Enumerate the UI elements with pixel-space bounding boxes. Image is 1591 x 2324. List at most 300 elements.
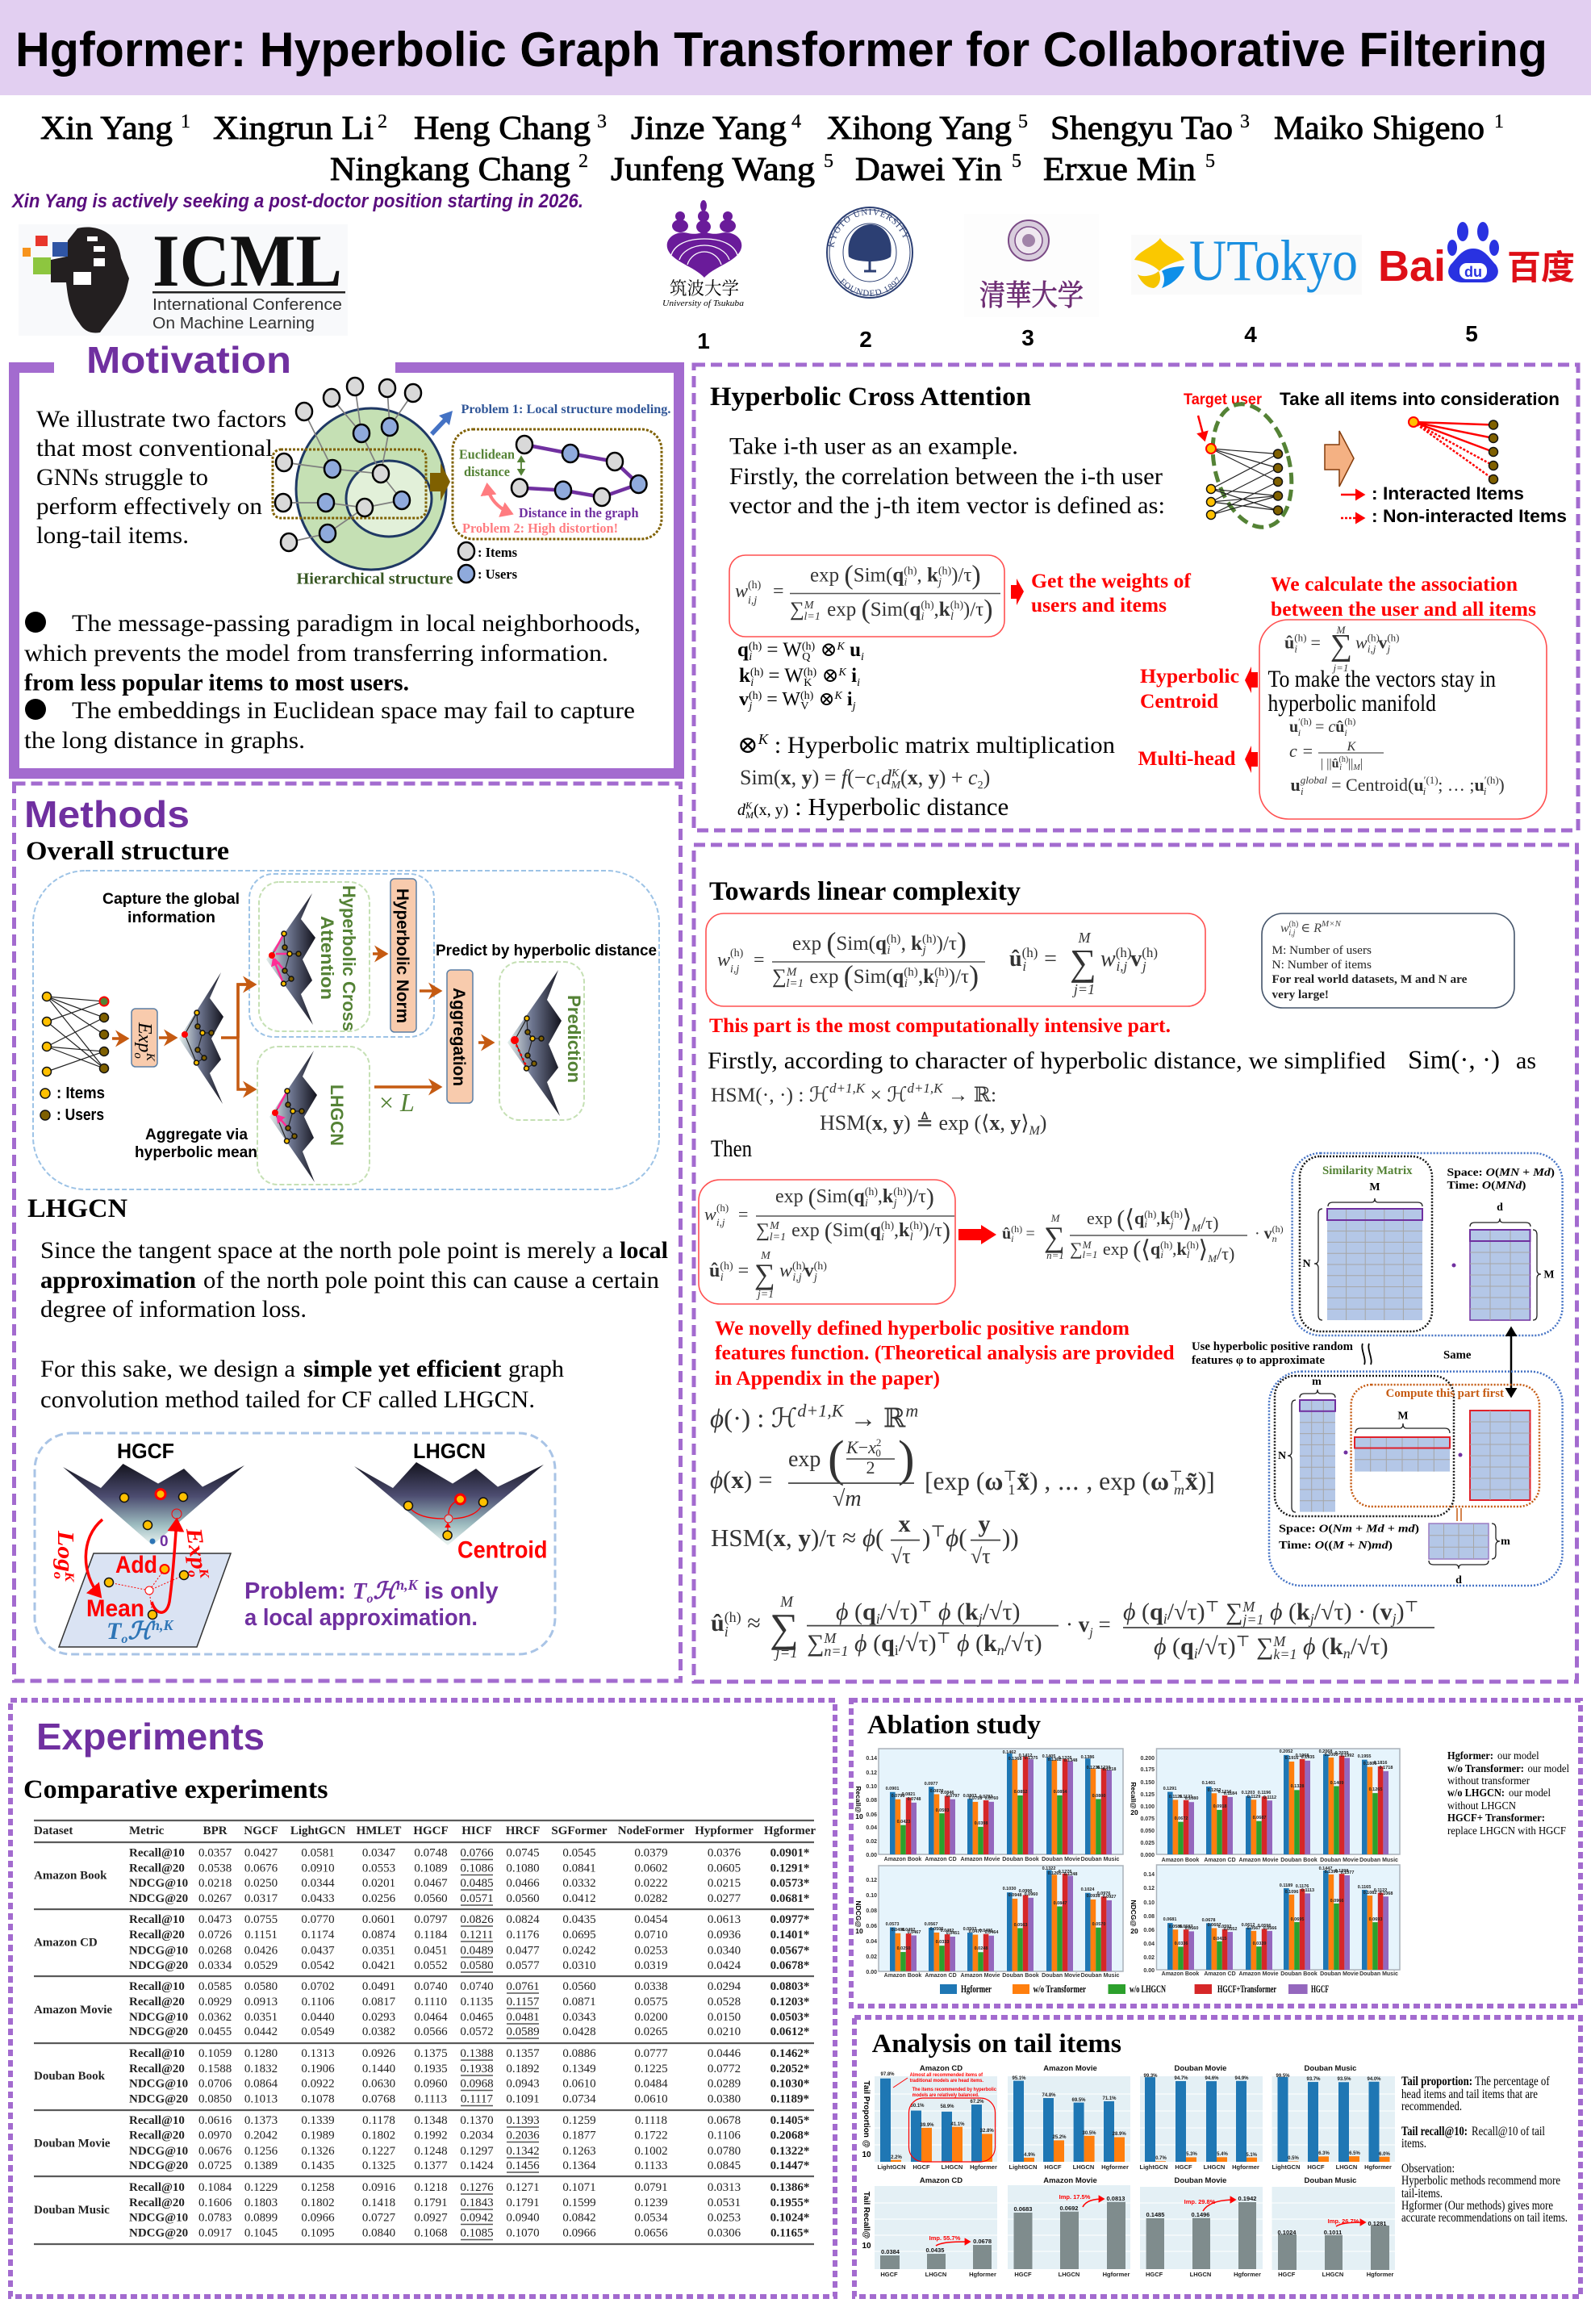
formula box: computationally intensive: k xyxy=(911,933,922,955)
chart: NDCG@20: 0.14 xyxy=(1143,1872,1155,1878)
diagram: random feature decomposition: Space: O(Nm + Md + md) xyxy=(1279,1524,1419,1536)
formula: HSM approximation: )) xyxy=(1002,1524,1019,1552)
formula box: computationally intensive: (h) xyxy=(730,947,744,959)
chart group: tail recall: Hgformer xyxy=(1103,2271,1130,2278)
rows: Douban Music: 0.0916 xyxy=(362,2181,396,2194)
rows: Douban Book: 0.1349 xyxy=(562,2063,596,2075)
chart group: tail proportion: 74.8% xyxy=(1042,2093,1056,2098)
rows: Amazon Book: 0.0681* xyxy=(770,1892,809,1905)
HGCF side: ℋ xyxy=(127,1618,156,1645)
formula: rewritten attention: /τ) xyxy=(1217,1244,1234,1264)
formula: rewritten attention: M xyxy=(1050,1212,1061,1224)
chart: Recall@20: 0.1409 xyxy=(1330,1781,1343,1786)
text: hyperbolic matrix multiplication: K xyxy=(758,731,769,747)
Exp box: Exp xyxy=(134,1022,155,1052)
arrow: red block xyxy=(958,1225,996,1244)
formulas: q k v: (h) xyxy=(804,667,817,679)
HGCF side: o xyxy=(185,1570,199,1578)
rows: Douban Movie: 0.1405* xyxy=(770,2114,809,2127)
rows: Douban Book: 0.1388 xyxy=(460,2047,494,2060)
chart: Recall@10: 0.0901 xyxy=(886,1787,899,1791)
note: use random features to approximate: Use hyperbolic positive random xyxy=(1192,1340,1353,1353)
rows: Douban Music: 0.0656 xyxy=(634,2227,668,2240)
formula box: centroid: i xyxy=(1301,785,1304,797)
rows: Douban Movie: 0.1377 xyxy=(414,2159,448,2172)
formula box: computationally intensive: Sim( xyxy=(836,933,875,955)
heading: Analysis on tail items xyxy=(872,2029,1121,2059)
chart: NDCG@20: 0.1189 xyxy=(1280,1883,1292,1888)
formula: rewritten attention: q xyxy=(1134,1208,1145,1228)
heading: Towards linear complexity xyxy=(709,877,1021,906)
formula box: centroid: global xyxy=(1301,774,1327,786)
diagram: overall structure: LHGCN xyxy=(327,1085,347,1146)
formula: rewritten attention: , xyxy=(1172,1239,1176,1259)
chart: NDCG@10: 0.0464 xyxy=(985,1930,999,1935)
arrow: to centroid note xyxy=(1245,667,1258,693)
rows: Amazon CD: 0.0340 xyxy=(708,1945,741,1958)
formula box: original weights: i xyxy=(720,1272,724,1284)
author list: Junfeng Wang xyxy=(611,150,815,187)
chart: Recall@20: 0.1129 xyxy=(1247,1795,1260,1799)
chart: NDCG@10: 0.0563 xyxy=(1014,1923,1027,1928)
formula box: computationally intensive: j xyxy=(921,944,926,957)
chart: Recall@20: 0.000 xyxy=(1140,1853,1155,1858)
formula box: attention weights: ( xyxy=(844,560,854,591)
formula: rewritten attention: ∑ xyxy=(1070,1239,1083,1259)
problem statement xyxy=(244,1577,499,1631)
text: intro: Firstly, the correlation between the i-th user xyxy=(729,463,1163,490)
formula box: original weights: (h) xyxy=(716,1202,729,1214)
formula box: original weights: i xyxy=(881,1231,884,1244)
chart: NDCG@20: 0.0339 xyxy=(1253,1942,1266,1946)
formula box: computationally intensive: , xyxy=(901,933,911,955)
formula: final approximation: M xyxy=(779,1594,794,1611)
logo: ICML xyxy=(19,219,348,336)
formulas: q k v: i xyxy=(750,677,754,689)
table header: NodeFormer xyxy=(618,1825,685,1837)
text: model definitions: w/o Transformer: xyxy=(1447,1763,1524,1775)
chart: Recall@20: 0.1816 xyxy=(1374,1761,1387,1766)
diagram: similarity matrix: M xyxy=(1543,1269,1555,1281)
rows: Douban Movie: 0.1325 xyxy=(362,2159,395,2172)
formula: rewritten attention: (h) xyxy=(1171,1208,1183,1220)
chart: Recall@20: 0.150 xyxy=(1140,1780,1155,1786)
formula: phi x: 1 xyxy=(1008,1482,1015,1498)
formula box: centroid: K xyxy=(1347,740,1357,754)
formula box: computationally intensive: (h) xyxy=(1142,945,1158,960)
formula box: centroid: (h) xyxy=(1344,716,1355,727)
author list: 5 xyxy=(824,151,833,172)
chart: Recall@10: 0.0760 xyxy=(985,1796,998,1801)
chart: NDCG@10: 0.12 xyxy=(866,1878,877,1883)
formula: rewritten attention: j xyxy=(1169,1218,1174,1230)
formulas: q k v: k xyxy=(739,665,750,687)
rows: Douban Book: 0.0943 xyxy=(506,2078,540,2091)
diagram: similarity matrix: d xyxy=(1497,1202,1503,1214)
formulas: q k v: = W xyxy=(762,689,800,710)
formulas: q k v: (h) xyxy=(749,690,762,702)
formula: HSM approximation: √τ xyxy=(971,1544,991,1568)
rows: Douban Music: 0.0966 xyxy=(562,2227,596,2240)
rows: Amazon Movie: 0.0913 xyxy=(244,1996,278,2008)
chart group: tail proportion: Douban Movie xyxy=(1175,2064,1226,2073)
formula: HSM definition: M xyxy=(1028,1124,1041,1138)
chart group: tail proportion: 60.1% xyxy=(910,2104,925,2109)
rows: Douban Book: 0.0968 xyxy=(460,2078,494,2091)
hyperboloid: prediction xyxy=(507,970,562,1116)
formula box: original weights: û xyxy=(709,1260,720,1281)
rows: Douban Movie: 0.1002 xyxy=(634,2145,668,2158)
rows: Amazon Book: 0.0433 xyxy=(301,1892,335,1905)
chart: Recall@10: 0.1236 xyxy=(1087,1766,1100,1770)
rows: Amazon Movie: 0.0702 xyxy=(301,1980,335,1993)
diagram: random feature decomposition: Compute this part first xyxy=(1386,1387,1504,1400)
table header: LightGCN xyxy=(290,1825,345,1837)
label: hierarchical structure: Hierarchical structure xyxy=(297,570,453,587)
chart: NDCG@20: Douban Music xyxy=(1359,1971,1398,1977)
logo: ICML: On Machine Learning xyxy=(152,315,315,332)
formula box: centroid: (h) xyxy=(1294,631,1306,644)
chart: NDCG@10: 0.1322 xyxy=(1042,1866,1055,1871)
problem statement: ℋ xyxy=(373,1578,400,1604)
formula box: computationally intensive: = xyxy=(754,950,765,971)
repeat L times: × L xyxy=(379,1088,415,1117)
formula: final approximation: j=1 xyxy=(773,1645,798,1661)
rows: Amazon Movie: 0.0150 xyxy=(708,2011,741,2024)
rows: Douban Movie: 0.0845 xyxy=(708,2159,741,2172)
formula: rewritten attention: û xyxy=(1002,1225,1011,1243)
formula: final approximation: ⊤ xyxy=(1236,1633,1250,1650)
heading: Ablation study xyxy=(867,1711,1042,1740)
formula: final approximation xyxy=(711,1594,1434,1662)
info box: matrix size: very large! xyxy=(1272,989,1329,1001)
rows: Douban Movie: 0.1348 xyxy=(414,2114,448,2127)
diagram: similarity matrix: N xyxy=(1302,1258,1311,1270)
formula: rewritten attention: ∑ xyxy=(1044,1221,1065,1253)
author list: Xingrun Li xyxy=(213,109,374,146)
formula: rewritten attention: i xyxy=(1011,1233,1013,1244)
text: bullet points xyxy=(24,610,641,754)
chart group: tail proportion: Hgformer xyxy=(1101,2163,1129,2171)
text: tail analysis notes: Hgformer (Our methods) gives more xyxy=(1401,2199,1553,2213)
formula: phi x xyxy=(710,1432,1215,1511)
formulas: q k v: (h) xyxy=(800,690,814,702)
info box: matrix size: For real world datasets, M and N are xyxy=(1272,973,1468,986)
note: multi-head: Multi-head xyxy=(1138,748,1236,770)
formula: final approximation: ⊤ xyxy=(1405,1599,1418,1616)
chart: NDCG@10: 0.1030 xyxy=(1003,1887,1016,1891)
chart: Recall@20: 0.1265 xyxy=(1369,1787,1382,1792)
formula box: computationally intensive: w xyxy=(1100,947,1116,972)
rows: Amazon Book: 0.0250 xyxy=(244,1877,278,1890)
labels xyxy=(102,891,657,1161)
chart group: tail recall: 0.1496 xyxy=(1192,2211,1209,2218)
formula: rewritten attention: l=1 xyxy=(1083,1248,1097,1260)
formula: rewritten attention: · v xyxy=(1255,1225,1272,1243)
formula box: centroid: ′(h) xyxy=(1298,716,1312,727)
rows: Amazon CD: 0.0253 xyxy=(634,1945,668,1958)
rows: Amazon Book: 0.0560 xyxy=(414,1892,448,1905)
logo: Baidu: du xyxy=(1464,264,1482,280)
rows: Amazon CD: 0.0437 xyxy=(301,1945,335,1958)
formulas: q k v: (h) xyxy=(749,641,762,653)
formula box: centroid: (h) xyxy=(1387,631,1400,644)
formulas: q k v: u xyxy=(850,639,861,661)
chart: Recall@20: 0.1126 xyxy=(1169,1795,1182,1799)
logo: Kyoto University: KYOTO UNIVERSITY xyxy=(828,208,909,248)
chart group: tail proportion: 97.8% xyxy=(880,2072,895,2077)
text: tail analysis notes: Tail proportion: xyxy=(1401,2075,1472,2088)
diagram: overall structure: Attention xyxy=(317,916,337,1000)
chart: Recall@10: 0.0759 xyxy=(969,1796,982,1801)
formulas: q k v: i xyxy=(851,665,857,687)
author list: Heng Chang xyxy=(414,109,591,146)
rows: Douban Music: 0.1084 xyxy=(198,2181,232,2194)
formula: sim: 2 xyxy=(978,780,983,792)
formula: rewritten attention: (h) xyxy=(1272,1223,1284,1235)
LHGCN side xyxy=(354,1439,547,1564)
chart: NDCG@20: NDCG@ xyxy=(1130,1900,1138,1927)
info box: matrix size: M: Number of users xyxy=(1272,944,1372,957)
rows: Douban Music: 0.0531 xyxy=(708,2197,741,2209)
text: hyperbolic distance: : Hyperbolic distance xyxy=(788,792,1008,821)
chart: Recall@20: 0.1203 xyxy=(1242,1791,1255,1795)
formula box: computationally intensive: (h) xyxy=(904,966,918,979)
note: hyperbolic random features: We novelly defined hyperbolic positive random xyxy=(715,1318,1130,1340)
formula box: original weights: , xyxy=(894,1220,899,1241)
formula: rewritten attention: exp xyxy=(1098,1239,1133,1259)
rows: Douban Book: 0.1938 xyxy=(460,2063,494,2075)
formula: final approximation: n xyxy=(1343,1645,1351,1661)
text: tail analysis notes: Observation: xyxy=(1401,2162,1455,2176)
chart: Recall@20: 0.1080 xyxy=(1185,1796,1198,1801)
rows: Douban Book: 0.1935 xyxy=(414,2063,448,2075)
HGCF side: K xyxy=(196,1567,211,1580)
chart group: tail proportion: LHGCN xyxy=(942,2163,963,2171)
chart group: tail recall: 0.1942 xyxy=(1238,2195,1256,2202)
diagram: random feature decomposition: N xyxy=(1278,1450,1286,1462)
rows: Douban Music: 0.0966 xyxy=(301,2212,335,2225)
formula box: centroid: = xyxy=(1306,633,1321,652)
legend: : Items xyxy=(56,1085,105,1102)
formula box: original weights: Sim( xyxy=(833,1220,870,1241)
formula box: original weights: ( xyxy=(825,1218,833,1244)
formula box: centroid: (h) xyxy=(1368,631,1380,644)
formula: rewritten attention: (h) xyxy=(1187,1239,1199,1251)
chart: Recall@10: 0.0803 xyxy=(963,1794,976,1799)
diagram: similarity matrix xyxy=(1292,1153,1563,1335)
chart: NDCG@10 xyxy=(854,1866,1123,1979)
author list: 2 xyxy=(578,151,588,172)
rows: Amazon Book: 0.0676 xyxy=(244,1862,278,1875)
text: model definitions: Hgformer: xyxy=(1447,1750,1493,1762)
formula box: computationally intensive: )/τ xyxy=(937,933,957,955)
formula box: original weights: M xyxy=(769,1220,780,1232)
chart: NDCG@10: 0.1276 xyxy=(1059,1870,1071,1875)
diagram: random feature decomposition: d xyxy=(1455,1574,1462,1586)
chart: NDCG@20: 0.0560 xyxy=(1185,1926,1198,1931)
LHGCN side: Centroid xyxy=(457,1537,547,1564)
chart: NDCG@10: 0.08 xyxy=(866,1908,877,1914)
formula: final approximation: ϕ (q xyxy=(1154,1633,1194,1660)
chart group: tail recall: 0.0813 xyxy=(1107,2195,1125,2202)
formula: rewritten attention: i xyxy=(1160,1248,1163,1260)
chart group: tail recall: LHGCN xyxy=(925,2271,946,2278)
formula box: original weights: (h) xyxy=(909,1220,923,1232)
note: use random features to approximate xyxy=(1192,1340,1372,1367)
formula box: computationally intensive: l xyxy=(935,977,938,990)
formula: final approximation: ϕ (k xyxy=(938,1599,979,1625)
rows: Douban Music: Douban Music xyxy=(34,2204,110,2217)
chart: Recall@10: Douban Movie xyxy=(1042,1857,1080,1862)
rows: Douban Movie: 0.1989 xyxy=(301,2130,335,2142)
formulas: q k v: ⊗ xyxy=(813,689,835,710)
chart group: tail proportion: 93.7% xyxy=(1306,2077,1321,2082)
author list: Xihong Yang xyxy=(827,109,1012,146)
chart: NDCG@20: 0.0592 xyxy=(1218,1925,1231,1929)
author list: Xin Yang xyxy=(40,109,173,146)
chart group: tail recall: 0.1485 xyxy=(1146,2211,1164,2218)
text: model definitions: our model xyxy=(1497,1750,1539,1762)
rows: Amazon CD: 0.0421 xyxy=(362,1959,395,1972)
chart: Recall@20: 0.1121 xyxy=(1180,1795,1192,1799)
rows: Amazon Movie: 0.0293 xyxy=(362,2011,395,2024)
chart: NDCG@10: 0.0333 xyxy=(936,1940,949,1945)
text: LHGCN explanation: of the north pole point this can cause a certain xyxy=(203,1267,659,1294)
formulas: q k v: ⊗ xyxy=(815,639,837,661)
rows: Amazon CD: 0.0552 xyxy=(414,1959,448,1972)
text: intro: GNNs struggle to xyxy=(36,464,208,491)
formulas: q k v: i xyxy=(861,651,864,663)
rows: Amazon CD: Amazon CD xyxy=(34,1937,98,1950)
rows: Amazon CD: 0.0726 xyxy=(198,1929,232,1942)
labels: hyperbolic mean xyxy=(135,1144,257,1161)
rows: Amazon Book: 0.0571 xyxy=(460,1892,494,1905)
chart: Recall@10: 0.0821 xyxy=(902,1792,915,1797)
rows: Douban Music: 0.1418 xyxy=(362,2197,395,2209)
rows: Douban Book: 0.0772 xyxy=(708,2063,741,2075)
text: LHGCN explanation: For this sake, we design a xyxy=(40,1356,295,1382)
author list: 1 xyxy=(1494,111,1504,132)
table header xyxy=(34,1825,816,1837)
labels: Predict by hyperbolic distance xyxy=(436,943,657,959)
rows: Douban Book: 0.0706 xyxy=(198,2078,232,2091)
formula box: attention weights: l=1 xyxy=(804,611,821,623)
formula: rewritten attention: = xyxy=(1021,1225,1035,1243)
chart: Recall@20: 0.0672 xyxy=(1175,1816,1188,1821)
diagram: all items fan: Take all items into consideration xyxy=(1280,389,1560,409)
chart: Recall@10: 0.0423 xyxy=(897,1820,910,1825)
formula box: centroid: (h) xyxy=(1339,755,1348,764)
chart group: tail proportion: 71.1% xyxy=(1102,2096,1117,2101)
chart: NDCG@10: 0.10 xyxy=(866,1893,877,1899)
formula: final approximation: û xyxy=(711,1610,725,1636)
rows: Douban Book: 0.1189* xyxy=(770,2093,809,2106)
chart group: tail proportion: HGCF xyxy=(1175,2163,1192,2171)
chart: Recall@10: 0.02 xyxy=(866,1839,877,1845)
logo: Tsinghua University: 清華大学 xyxy=(979,279,1084,311)
formulas: q k v: V xyxy=(800,700,808,713)
chart group: tail proportion: HGCF xyxy=(1044,2163,1062,2171)
text: intro: vector and the j-th item vector is defined as: xyxy=(729,492,1165,519)
rows: Douban Music: 0.1955* xyxy=(770,2197,809,2209)
chart: Recall@10: 0.0854 xyxy=(1054,1790,1067,1795)
rows: Amazon CD: 0.0577 xyxy=(506,1959,540,1972)
rows: Douban Movie: 0.1106 xyxy=(708,2130,741,2142)
chart group: tail proportion: LightGCN xyxy=(1272,2163,1301,2171)
legend: ablation models: w/o Transformer xyxy=(1034,1983,1086,1995)
chart: Recall@20: Recall@ xyxy=(1130,1782,1138,1809)
table header: HGCF xyxy=(413,1825,449,1837)
formulas: q k v: = W xyxy=(763,665,804,687)
formula: HSM definition: d+1,K xyxy=(829,1080,866,1096)
rows: Douban Book: 0.2052* xyxy=(770,2063,809,2075)
chart group: tail proportion: Tail Proportion @ xyxy=(862,2081,871,2148)
formula: final approximation: n=1 xyxy=(824,1643,849,1659)
chart: Recall@10: 0.1462 xyxy=(1003,1750,1016,1755)
note: association: between the user and all items xyxy=(1271,599,1536,621)
formula: rewritten attention: , xyxy=(1156,1208,1161,1228)
formula box: computationally intensive: ) xyxy=(969,959,979,992)
chart: NDCG@10: 0.0492 xyxy=(902,1928,915,1933)
chart group: tail recall: 0.0692 xyxy=(1060,2205,1078,2212)
formula box: original weights: j xyxy=(892,1198,897,1210)
chart: NDCG@10: Amazon Book xyxy=(884,1973,921,1979)
formula: HSM definition: HSM(x, y) ≜ exp (⟨x, y⟩ xyxy=(820,1111,1029,1135)
formula: HSM definition: HSM(·, ·) : ℋ xyxy=(711,1083,829,1106)
text: intro: perform effectively on xyxy=(36,493,262,520)
rows: Amazon CD: 0.0351 xyxy=(362,1945,395,1958)
chart: Recall@20: Douban Book xyxy=(1280,1858,1317,1863)
logo: UTokyo: UTokyo xyxy=(1189,228,1358,293)
diagram: target user bipartite graph xyxy=(1184,391,1305,536)
rows: Amazon CD: 0.1176 xyxy=(507,1929,540,1942)
formula: phi x: ⊤ xyxy=(1169,1468,1183,1484)
text: LHGCN explanation: simple yet efficient xyxy=(303,1356,502,1382)
diagram: graph distance: distance xyxy=(464,464,510,479)
chart: NDCG@10: 0.0250 xyxy=(897,1946,910,1951)
rows: Amazon Book: 0.0910 xyxy=(301,1862,335,1875)
formula box: centroid: u xyxy=(1291,775,1301,795)
rows: Douban Music: 0.0534 xyxy=(634,2212,668,2225)
rows: Amazon CD: 0.1174 xyxy=(302,1929,335,1942)
chart: NDCG@10: 0.0847 xyxy=(1054,1901,1067,1906)
rows: Amazon CD: 0.0755 xyxy=(244,1913,278,1926)
rows: Amazon CD: NDCG@10 xyxy=(129,1945,188,1958)
chart group: tail recall: Imp. 26.7% xyxy=(1328,2217,1359,2225)
table header: Dataset xyxy=(34,1825,73,1837)
rows: Douban Music: 0.1276 xyxy=(460,2181,494,2194)
formula: final approximation: j xyxy=(1309,1611,1314,1627)
rows: Douban Book: 0.1091 xyxy=(506,2093,540,2106)
formula box: attention weights: l xyxy=(950,611,954,623)
formulas: q k v: ⊗ xyxy=(816,665,839,687)
diagram: overall structure: Prediction xyxy=(564,995,584,1083)
chart: Recall@10: 0.1218 xyxy=(1103,1767,1116,1772)
formula box: centroid: M xyxy=(1352,763,1360,772)
formula: phi x: 2 xyxy=(866,1457,875,1478)
hyperboloid: LHGCN xyxy=(269,1051,317,1182)
formula: phi x: [exp (ω xyxy=(925,1467,1003,1495)
chart: Recall@20: 0.2068 xyxy=(1319,1749,1332,1754)
table header: NGCF xyxy=(244,1825,278,1837)
chart group: tail proportion: 94.0% xyxy=(1367,2077,1381,2082)
rows: Douban Movie: 0.1370 xyxy=(460,2114,494,2127)
formula box: centroid: = xyxy=(1311,718,1328,736)
table header: Metric xyxy=(129,1825,165,1837)
rows: Douban Movie: 0.1424 xyxy=(460,2159,494,2172)
chart: Recall@10: 0.1412 xyxy=(1019,1753,1032,1758)
